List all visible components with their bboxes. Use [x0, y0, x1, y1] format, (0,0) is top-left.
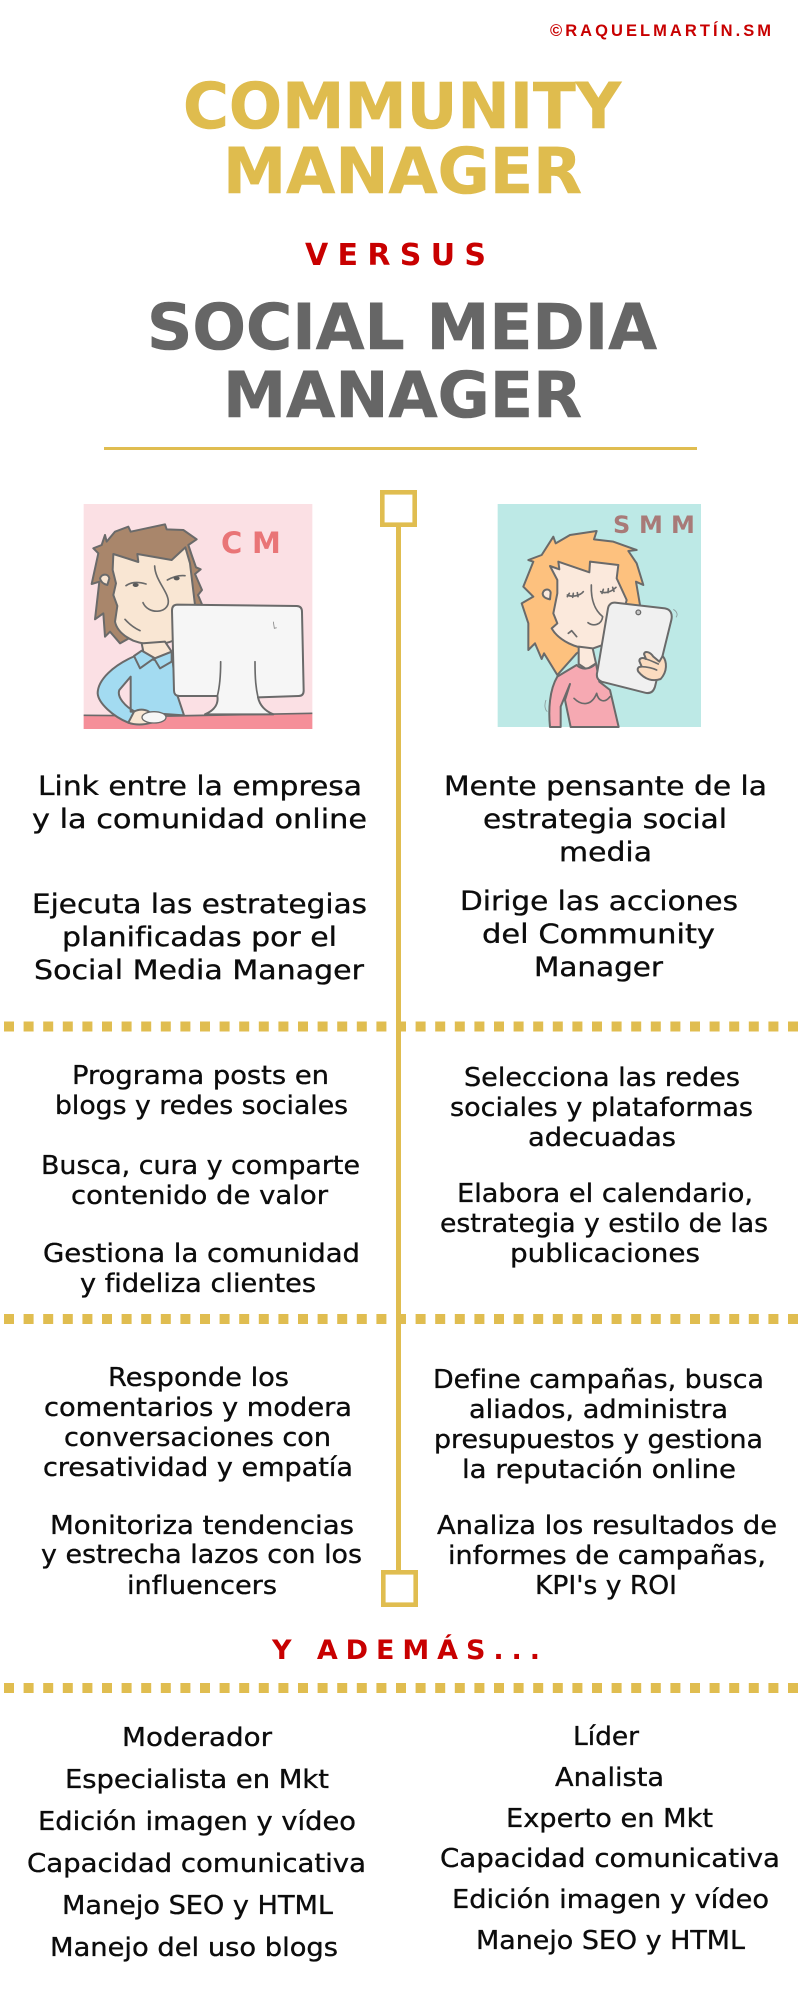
- text: CM community: [41, 1363, 362, 1601]
- tablet: [597, 603, 672, 693]
- text: SMM definition: estrategia social: [483, 804, 727, 835]
- text: CM definition: [32, 771, 367, 986]
- text: CM definition: Link entre la empresa: [38, 771, 362, 802]
- face: [550, 562, 627, 649]
- heading: versus: VERSUS: [305, 238, 486, 273]
- text: SMM tasks: Elabora el calendario,: [457, 1179, 753, 1209]
- list: SMM extra skills: Capacidad comunicativa: [440, 1844, 780, 1874]
- text: SMM campaigns: informes de campañas,: [448, 1541, 766, 1571]
- text: CM tasks: blogs y redes sociales: [55, 1091, 348, 1121]
- text: SMM campaigns: Define campañas, busca: [433, 1365, 764, 1395]
- text: CM community: Responde los: [108, 1363, 289, 1393]
- title: Social Media Manager: [147, 291, 657, 432]
- face: [113, 547, 195, 645]
- list: CM extra skills: Manejo SEO y HTML: [62, 1891, 334, 1921]
- text: SMM tasks: Selecciona las redes: [464, 1063, 740, 1093]
- text: CM tasks: Programa posts en: [72, 1061, 329, 1091]
- text: CM tasks: contenido de valor: [71, 1181, 329, 1211]
- title: Social Media Manager: SOCIAL MEDIA: [147, 291, 657, 364]
- text: CM tasks: [41, 1061, 360, 1299]
- monitor: [172, 605, 304, 714]
- dotted divider 1: [4, 1022, 798, 1032]
- illustration: CM man at computer: [84, 504, 312, 729]
- title underline: [104, 447, 697, 450]
- list: SMM extra skills: Analista: [555, 1763, 664, 1793]
- text: SMM tasks: publicaciones: [510, 1239, 700, 1269]
- list: SMM extra skills: Edición imagen y vídeo: [452, 1885, 769, 1915]
- text: CM community: cresatividad y empatía: [43, 1453, 353, 1483]
- title: Community Manager: MANAGER: [223, 135, 582, 208]
- text: CM community: conversaciones con: [64, 1423, 331, 1453]
- text: CM definition: planificadas por el: [62, 922, 337, 953]
- text: SMM definition: del Community: [482, 919, 715, 950]
- label: SMM: S: [613, 511, 630, 539]
- list: CM extra skills: [27, 1723, 366, 1963]
- label: CM: M: [252, 526, 281, 560]
- text: CM definition: Social Media Manager: [34, 955, 365, 986]
- heading: y además: Y ADEMÁS...: [271, 1634, 540, 1666]
- title: Community Manager: COMMUNITY: [183, 70, 622, 143]
- copyright credit: ©RAQUELMARTÍN.SM: [550, 21, 771, 40]
- dotted divider 2: [4, 1314, 798, 1324]
- text: CM tasks: Gestiona la comunidad: [43, 1239, 360, 1269]
- text: CM definition: Ejecuta las estrategias: [32, 889, 367, 920]
- text: CM community: comentarios y modera: [44, 1393, 352, 1423]
- text: CM tasks: y fideliza clientes: [80, 1269, 316, 1299]
- label: CM: C: [221, 526, 242, 560]
- text: CM community: Monitoriza tendencias: [50, 1511, 354, 1541]
- text: SMM campaigns: [433, 1365, 777, 1601]
- text: SMM campaigns: KPI's y ROI: [535, 1571, 677, 1601]
- hand: [638, 652, 666, 680]
- text: SMM definition: Dirige las acciones: [460, 886, 738, 917]
- label: SMM: M: [639, 511, 663, 539]
- text: SMM campaigns: aliados, administra: [469, 1395, 728, 1425]
- list: CM extra skills: Edición imagen y vídeo: [38, 1807, 356, 1837]
- list: CM extra skills: Manejo del uso blogs: [50, 1933, 338, 1963]
- hair: [522, 531, 643, 675]
- text: SMM tasks: estrategia y estilo de las: [440, 1209, 768, 1239]
- text: SMM definition: Mente pensante de la: [444, 771, 767, 802]
- illustration: SMM woman with tablet: [498, 504, 701, 727]
- hair: [92, 524, 203, 643]
- list: SMM extra skills: [440, 1722, 780, 1956]
- list: SMM extra skills: Experto en Mkt: [506, 1804, 713, 1834]
- text: CM tasks: Busca, cura y comparte: [41, 1151, 360, 1181]
- list: SMM extra skills: Líder: [573, 1722, 640, 1752]
- text: SMM campaigns: Analiza los resultados de: [437, 1511, 777, 1541]
- dotted divider 3: [4, 1683, 798, 1693]
- title: Community Manager: [183, 70, 622, 208]
- blue shirt: [98, 653, 184, 723]
- list: CM extra skills: Especialista en Mkt: [65, 1765, 329, 1795]
- text: SMM tasks: [440, 1063, 768, 1269]
- list: CM extra skills: Moderador: [122, 1723, 273, 1753]
- text: CM definition: y la comunidad online: [32, 804, 367, 835]
- text: SMM definition: Manager: [534, 952, 664, 983]
- pink top: [549, 663, 619, 727]
- text: CM community: y estrecha lazos con los: [41, 1540, 362, 1570]
- text: SMM definition: [444, 771, 767, 983]
- text: SMM definition: media: [559, 837, 652, 868]
- text: SMM campaigns: la reputación online: [462, 1455, 736, 1485]
- title: Social Media Manager: MANAGER: [223, 359, 582, 432]
- label: SMM: M: [671, 511, 695, 539]
- text: SMM tasks: adecuadas: [528, 1123, 676, 1153]
- text: SMM campaigns: presupuestos y gestiona: [434, 1425, 763, 1455]
- text: CM community: influencers: [127, 1571, 277, 1601]
- list: CM extra skills: Capacidad comunicativa: [27, 1849, 366, 1879]
- list: SMM extra skills: Manejo SEO y HTML: [476, 1926, 746, 1956]
- text: SMM tasks: sociales y plataformas: [450, 1093, 753, 1123]
- central timeline with end squares: [382, 492, 416, 1605]
